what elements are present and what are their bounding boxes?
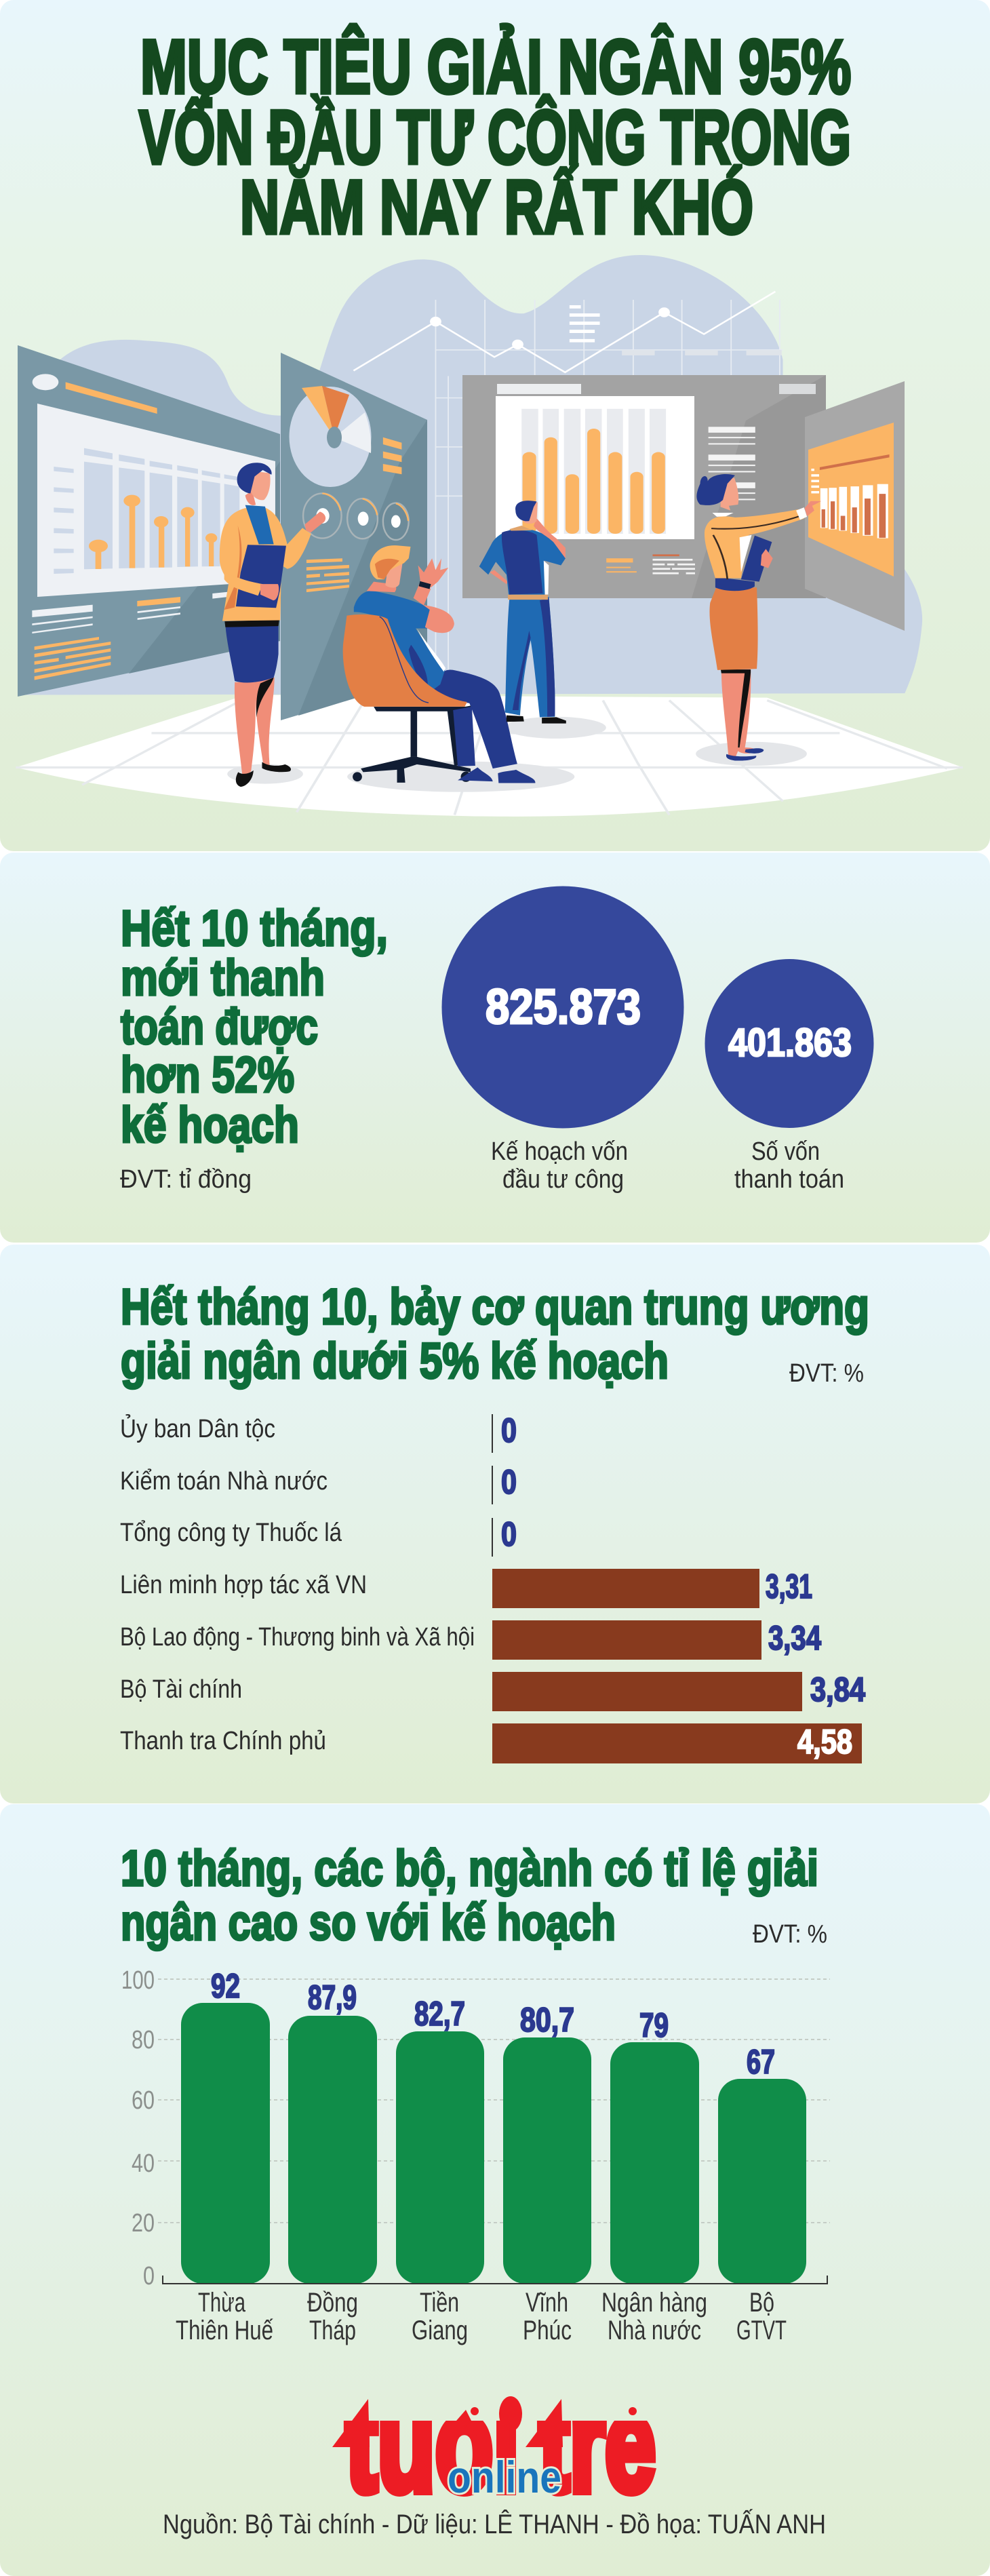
category labels: Thừa (198, 2288, 246, 2318)
label: planned capital: đầu tư công (502, 1165, 624, 1194)
illustration: right tilted screen (805, 381, 905, 631)
row labels: Liên minh hợp tác xã VN (120, 1571, 367, 1599)
category labels: Phúc (523, 2316, 572, 2345)
heading: ten months: Hết 10 tháng, (121, 900, 388, 956)
category labels: GTVT (736, 2316, 787, 2345)
y axis labels: 0 (143, 2262, 155, 2290)
illustration: middle tilted panel with gauge (281, 353, 427, 720)
label: planned capital (491, 1137, 628, 1194)
values: 82,7 (414, 1995, 465, 2033)
values: 92 (211, 1967, 240, 2005)
category labels: Đồng (307, 2288, 358, 2318)
y axis labels: 20 (132, 2209, 155, 2238)
category labels: Tháp (309, 2316, 356, 2345)
heading: high rates: 10 tháng, các bộ, ngành có tỉ lệ giải (121, 1840, 818, 1896)
figure: standing woman with folder (220, 463, 325, 787)
column chart (121, 1966, 830, 2345)
heading: ten months: mới thanh (121, 950, 325, 1006)
label: paid capital: Số vốn (751, 1137, 820, 1166)
heading: ten months: toán được (121, 998, 318, 1055)
row labels: Bộ Tài chính (120, 1675, 242, 1704)
values: 3,34 (768, 1619, 821, 1657)
values (211, 1967, 775, 2081)
title: NĂM NAY RẤT KHÓ (240, 165, 753, 250)
y axis labels: 80 (132, 2026, 155, 2054)
row labels: Ủy ban Dân tộc (120, 1413, 275, 1443)
values: 80,7 (520, 2001, 574, 2039)
illustration: background hills (16, 255, 963, 817)
values: 87,9 (308, 1978, 357, 2016)
row labels: Thanh tra Chính phủ (120, 1727, 326, 1755)
gridlines (158, 1979, 830, 2223)
panel: title and illustration (0, 0, 990, 851)
values: 79 (639, 2006, 669, 2044)
values: 0 (501, 1515, 517, 1553)
y axis labels: 100 (121, 1966, 155, 1995)
zero bars (492, 1414, 493, 1557)
category labels (176, 2288, 787, 2345)
category labels: Thiên Huế (176, 2316, 273, 2345)
logo: Tuổi Trẻ Online: trẻ (539, 2368, 656, 2520)
category labels: Ngân hàng (601, 2288, 707, 2318)
values: 0 (501, 1463, 517, 1501)
values: 4,58 (797, 1723, 852, 1761)
row labels: Bộ Lao động - Thương binh và Xã hội (120, 1623, 475, 1652)
unit note: ĐVT: tỉ đồng (120, 1165, 252, 1194)
heading: seven agencies (121, 1279, 869, 1389)
title (139, 24, 851, 250)
y axis labels: 40 (132, 2149, 155, 2178)
circle: paid capital: 401.863 (728, 1021, 852, 1065)
logo: Tuổi Trẻ Online (332, 2396, 656, 2497)
illustration: left tilted screen (18, 345, 280, 697)
figure: seated man in orange chair (343, 545, 535, 783)
y axis labels: 60 (132, 2086, 155, 2115)
panel: high-disbursement ministries (0, 1804, 990, 2576)
illustration: main grey dashboard screen (462, 375, 826, 598)
heading: ten months: kế hoạch (121, 1097, 299, 1153)
heading: ten months: hơn 52% (121, 1047, 294, 1103)
circle: planned capital (442, 886, 684, 1129)
row labels (120, 1413, 475, 1755)
category labels: Giang (412, 2316, 468, 2345)
figure: standing woman pointing at screen (696, 474, 821, 761)
bar chart: agencies (120, 1411, 865, 1763)
heading: ten months (121, 900, 388, 1153)
circle: planned capital: 825.873 (486, 980, 641, 1034)
heading: seven agencies: giải ngân dưới 5% kế hoạch (121, 1333, 669, 1389)
category labels: Nhà nước (608, 2316, 701, 2345)
y axis labels (121, 1966, 155, 2290)
values: 0 (501, 1411, 517, 1449)
illustration: line chart behind screens (353, 292, 783, 692)
category labels: Bộ (749, 2288, 774, 2318)
x axis (163, 2276, 827, 2284)
heading: high rates: ngân cao so với kế hoạch (121, 1894, 616, 1951)
heading: high rates (121, 1840, 818, 1951)
category labels: Vĩnh (526, 2288, 568, 2318)
values: 3,84 (810, 1671, 865, 1709)
value bars (492, 1569, 862, 1763)
figure: standing man viewed from behind (479, 501, 566, 724)
bars (181, 2003, 806, 2284)
values (501, 1411, 865, 1761)
unit note: ĐVT: % (753, 1920, 827, 1949)
label: planned capital: Kế hoạch vốn (491, 1137, 628, 1166)
panel: ten-month disbursement (0, 853, 990, 1243)
label: paid capital: thanh toán (734, 1165, 844, 1194)
label: paid capital (734, 1137, 844, 1194)
row labels: Tổng công ty Thuốc lá (120, 1519, 342, 1547)
row labels: Kiểm toán Nhà nước (120, 1467, 328, 1496)
category labels: Tiền (420, 2288, 459, 2318)
circle: paid capital (705, 959, 873, 1128)
values: 3,31 (766, 1567, 812, 1605)
unit note: ĐVT: % (789, 1359, 864, 1388)
source credit: Nguồn: Bộ Tài chính - Dữ liệu: LÊ THANH - Đồ họa: TUẤN ANH (163, 2508, 826, 2539)
values: 67 (747, 2043, 775, 2081)
logo: Tuổi Trẻ Online: tuổi (346, 2368, 519, 2520)
logo: Tuổi Trẻ Online: online (448, 2452, 561, 2502)
panel: seven central agencies (0, 1245, 990, 1803)
